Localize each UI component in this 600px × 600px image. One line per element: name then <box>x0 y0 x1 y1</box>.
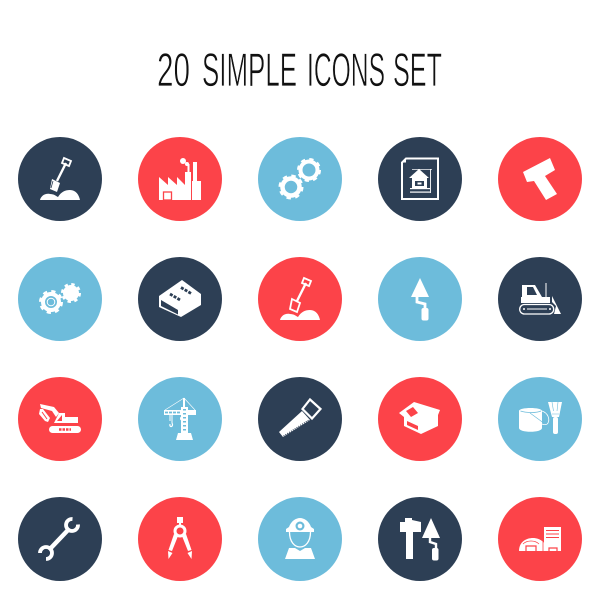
title: SIMPLE <box>202 43 297 96</box>
title: 20 <box>157 43 190 96</box>
icon: house blueprint <box>378 137 462 221</box>
icon grid <box>18 137 582 581</box>
icon: bulldozer <box>498 257 582 341</box>
title: SET <box>393 43 442 96</box>
icon: gears blue <box>258 137 342 221</box>
title: ICONS <box>307 43 385 96</box>
icon: t-shaped hammer <box>498 137 582 221</box>
icon: cardboard box <box>378 377 462 461</box>
icon: shovel navy <box>18 137 102 221</box>
icon: construction worker <box>258 497 342 581</box>
icon: buildings with dome <box>498 497 582 581</box>
icon: paint can and brush <box>498 377 582 461</box>
icon: gears pair <box>18 257 102 341</box>
icon: wrench <box>18 497 102 581</box>
icon: brick <box>138 257 222 341</box>
icon: shovel red <box>258 257 342 341</box>
icon: factory <box>138 137 222 221</box>
icon: hand saw <box>258 377 342 461</box>
icon: excavator <box>18 377 102 461</box>
icon: drawing compass <box>138 497 222 581</box>
icon: trowel <box>378 257 462 341</box>
icon: hammer and trowel <box>378 497 462 581</box>
icon: tower crane <box>138 377 222 461</box>
